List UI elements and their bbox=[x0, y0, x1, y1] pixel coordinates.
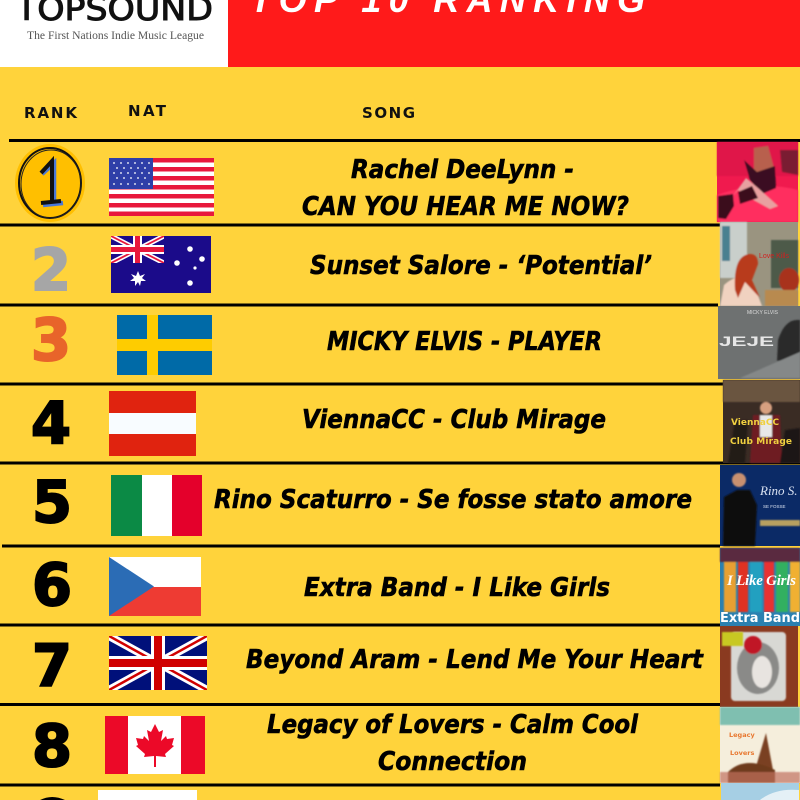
flag: Austria bbox=[109, 391, 196, 456]
rank 8: 8 bbox=[32, 712, 72, 780]
album art 5 bbox=[720, 465, 800, 546]
flag: United Kingdom bbox=[109, 636, 207, 690]
song 7: Beyond Aram - Lend Me Your Heart bbox=[246, 645, 704, 675]
logo panel bbox=[0, 0, 228, 67]
song 2: Sunset Salore - ‘Potential’ bbox=[310, 251, 652, 281]
song 6: Extra Band - I Like Girls bbox=[304, 573, 610, 603]
song 8: Connection bbox=[378, 747, 527, 777]
album art 3 text: JEJE bbox=[719, 333, 774, 349]
flag: ninth entry (cropped) bbox=[98, 790, 197, 800]
rank 4: 4 bbox=[31, 389, 71, 457]
logo tagline: The First Nations Indie Music League bbox=[27, 28, 204, 42]
album art 5 title: SE FOSSE bbox=[763, 504, 786, 509]
album art 6 band: Extra Band bbox=[720, 611, 800, 626]
column heading: rank: RANK bbox=[24, 104, 78, 122]
rank 5: 5 bbox=[32, 468, 72, 536]
flag: Italy bbox=[111, 475, 202, 536]
album art 4 subtitle: Club Mirage bbox=[730, 437, 792, 447]
album art 3 artist: MICKY ELVIS bbox=[747, 310, 779, 316]
flag: Canada bbox=[105, 716, 205, 774]
rank 2: 2 bbox=[31, 236, 71, 304]
song 8: Legacy of Lovers - Calm Cool bbox=[267, 710, 639, 740]
song 1: Rachel DeeLynn - bbox=[351, 155, 574, 185]
song 5: Rino Scaturro - Se fosse stato amore bbox=[214, 485, 692, 515]
rank 3: 3 bbox=[31, 306, 71, 374]
song 1: CAN YOU HEAR ME NOW? bbox=[302, 192, 629, 222]
flag: Czech Republic bbox=[109, 557, 201, 616]
album art 8 bbox=[720, 707, 800, 783]
album art 6 bbox=[720, 548, 800, 626]
rank 7: 7 bbox=[32, 632, 72, 700]
album art 8 lovers: Lovers bbox=[730, 749, 754, 757]
column heading: song: SONG bbox=[362, 104, 415, 122]
rank 6: 6 bbox=[32, 551, 72, 619]
rank 9 top edge (cropped by the frame) bbox=[40, 797, 65, 800]
album art 2 text: Love Kills bbox=[759, 253, 789, 260]
song 1 bbox=[302, 155, 629, 222]
album art 8 text: Legacy bbox=[729, 731, 755, 739]
album art 9 (cropped) bbox=[721, 783, 799, 800]
album art 4 text: ViennaCC bbox=[731, 418, 779, 428]
flag: Sweden bbox=[117, 315, 212, 375]
flag: USA bbox=[109, 158, 214, 216]
song 3: MICKY ELVIS - PLAYER bbox=[327, 327, 602, 357]
flag: Australia bbox=[111, 236, 211, 293]
album art 5 signature: Rino S. bbox=[759, 483, 798, 498]
album art 7 bbox=[720, 626, 798, 707]
album art 4 bbox=[723, 380, 800, 463]
album art 6 title: I Like Girls bbox=[726, 573, 796, 589]
column heading: nationality: NAT bbox=[128, 102, 167, 120]
rank 1 badge bbox=[15, 144, 85, 222]
album art 3 bbox=[718, 306, 800, 379]
song 4: ViennaCC - Club Mirage bbox=[302, 405, 606, 435]
title banner bbox=[228, 0, 800, 67]
album art 2 bbox=[720, 222, 799, 306]
song 8 bbox=[267, 710, 639, 777]
album art 1 bbox=[717, 142, 798, 222]
